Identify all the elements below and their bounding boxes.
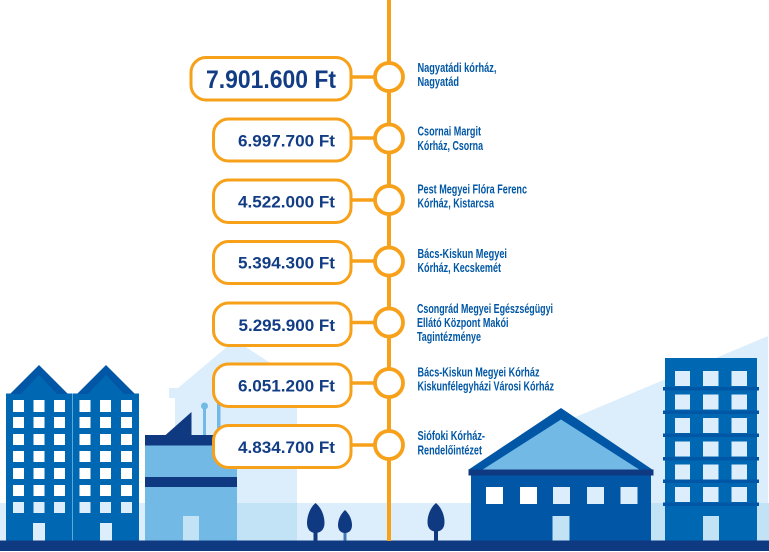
row: Kistarcsa: Pest Megyei Flóra Ferenc	[418, 182, 527, 196]
row: Siófok: Siófoki Kórház-	[418, 428, 485, 443]
row: Csorna: Kórház, Csorna	[418, 138, 484, 153]
row: Makó: 5.295.900 Ft	[238, 316, 335, 335]
row: Kecskemét: Kórház, Kecskemét	[418, 260, 502, 275]
building: factory	[145, 402, 237, 541]
timeline axis	[387, 0, 391, 541]
row: Makó: Tagintézménye	[417, 329, 481, 344]
row: Kistarcsa: 4.522.000 Ft	[238, 192, 335, 212]
row: Makó: Ellátó Központ Makói	[417, 315, 508, 330]
row: Kecskemét	[214, 242, 507, 284]
building: gabled house	[468, 408, 654, 541]
background skyline	[0, 336, 769, 541]
row: Kiskunfélegyháza	[214, 364, 554, 406]
row: Kiskunfélegyháza: 6.051.200 Ft	[238, 376, 335, 396]
row: Kiskunfélegyháza: Bács-Kiskun Megyei Kórház	[418, 364, 540, 380]
row: Kistarcsa: Kórház, Kistarcsa	[418, 196, 495, 210]
row: Kistarcsa	[214, 180, 527, 222]
row: Csorna: 6.997.700 Ft	[238, 132, 335, 150]
row: Siófok	[214, 426, 485, 468]
trees	[307, 503, 444, 541]
row: Makó	[214, 301, 553, 346]
building: twin apartment blocks	[6, 365, 139, 541]
row: Siófok: 4.834.700 Ft	[238, 438, 335, 457]
building: tower block	[663, 358, 759, 541]
row: Csorna	[214, 119, 484, 161]
row: Nagyatád: 7.901.600 Ft	[206, 66, 337, 94]
row: Kiskunfélegyháza: Kiskunfélegyházi Városi Kórház	[418, 378, 554, 394]
ground bar	[0, 540, 769, 551]
row: Csorna: Csornai Margit	[418, 124, 482, 138]
row: Nagyatád: Nagyatád	[418, 74, 459, 89]
row: Kecskemét: 5.394.300 Ft	[238, 254, 335, 272]
row: Makó: Csongrád Megyei Egészségügyi	[417, 301, 553, 316]
row: Kecskemét: Bács-Kiskun Megyei	[418, 246, 507, 261]
row: Nagyatád	[191, 58, 496, 100]
row: Siófok: Rendelőintézet	[418, 442, 483, 458]
row: Nagyatád: Nagyatádi kórház,	[418, 60, 496, 75]
